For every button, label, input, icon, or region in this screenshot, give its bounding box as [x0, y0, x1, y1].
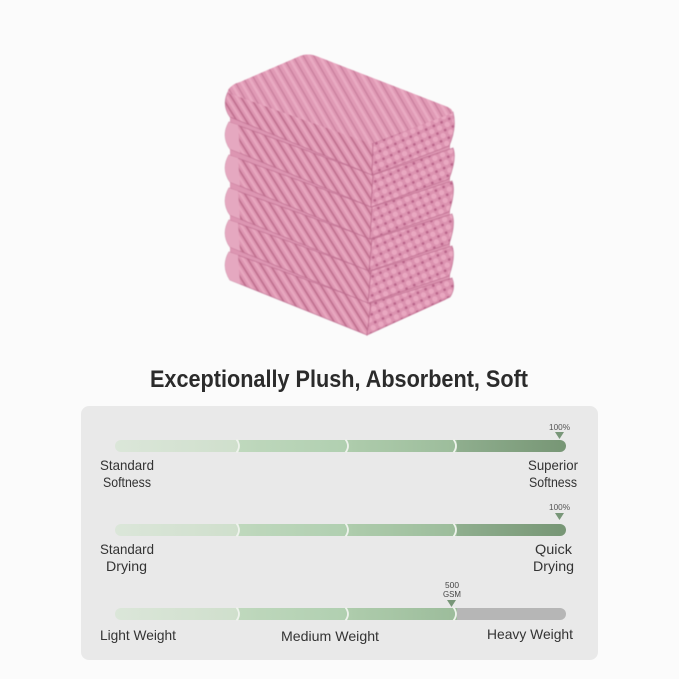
weight marker	[443, 580, 461, 607]
towel stack	[225, 54, 454, 335]
drying marker: 100%	[549, 502, 570, 512]
towel layer 6	[225, 252, 454, 335]
weight marker: GSM	[443, 589, 461, 599]
label: standard softness: Standard	[100, 457, 154, 473]
label: light weight: Light Weight	[100, 627, 176, 643]
label: quick drying: Quick	[535, 541, 573, 557]
weight meter	[100, 580, 573, 644]
title: Exceptionally Plush, Absorbent, Soft	[150, 366, 528, 393]
drying bar	[115, 524, 566, 536]
label: standard softness: Softness	[103, 474, 151, 490]
weight marker: 500	[445, 580, 459, 590]
label: standard drying	[100, 541, 154, 574]
towel silhouette	[230, 54, 450, 335]
label: heavy weight: Heavy Weight	[487, 626, 573, 642]
label: superior softness	[528, 457, 578, 490]
softness marker: 100%	[549, 422, 570, 432]
label: quick drying: Drying	[533, 558, 574, 574]
drying meter	[100, 502, 574, 574]
label: quick drying	[533, 541, 574, 574]
towel top face	[228, 54, 453, 143]
towel layer 1	[225, 90, 454, 175]
label: standard drying: Standard	[100, 541, 154, 557]
label: standard softness	[100, 457, 154, 490]
label: superior softness: Superior	[528, 457, 578, 473]
softness meter	[100, 422, 578, 490]
label: superior softness: Softness	[529, 474, 577, 490]
towel layer 5	[225, 220, 453, 303]
label: standard drying: Drying	[106, 558, 147, 574]
towel layer 4	[225, 188, 453, 271]
panel: ratings	[81, 406, 598, 660]
softness marker	[549, 422, 570, 439]
drying marker	[549, 502, 570, 520]
towel layer 3	[225, 155, 453, 239]
softness bar	[115, 440, 566, 452]
weight bar	[115, 608, 566, 620]
towel layer 2	[225, 122, 454, 207]
label: medium weight: Medium Weight	[281, 628, 379, 644]
